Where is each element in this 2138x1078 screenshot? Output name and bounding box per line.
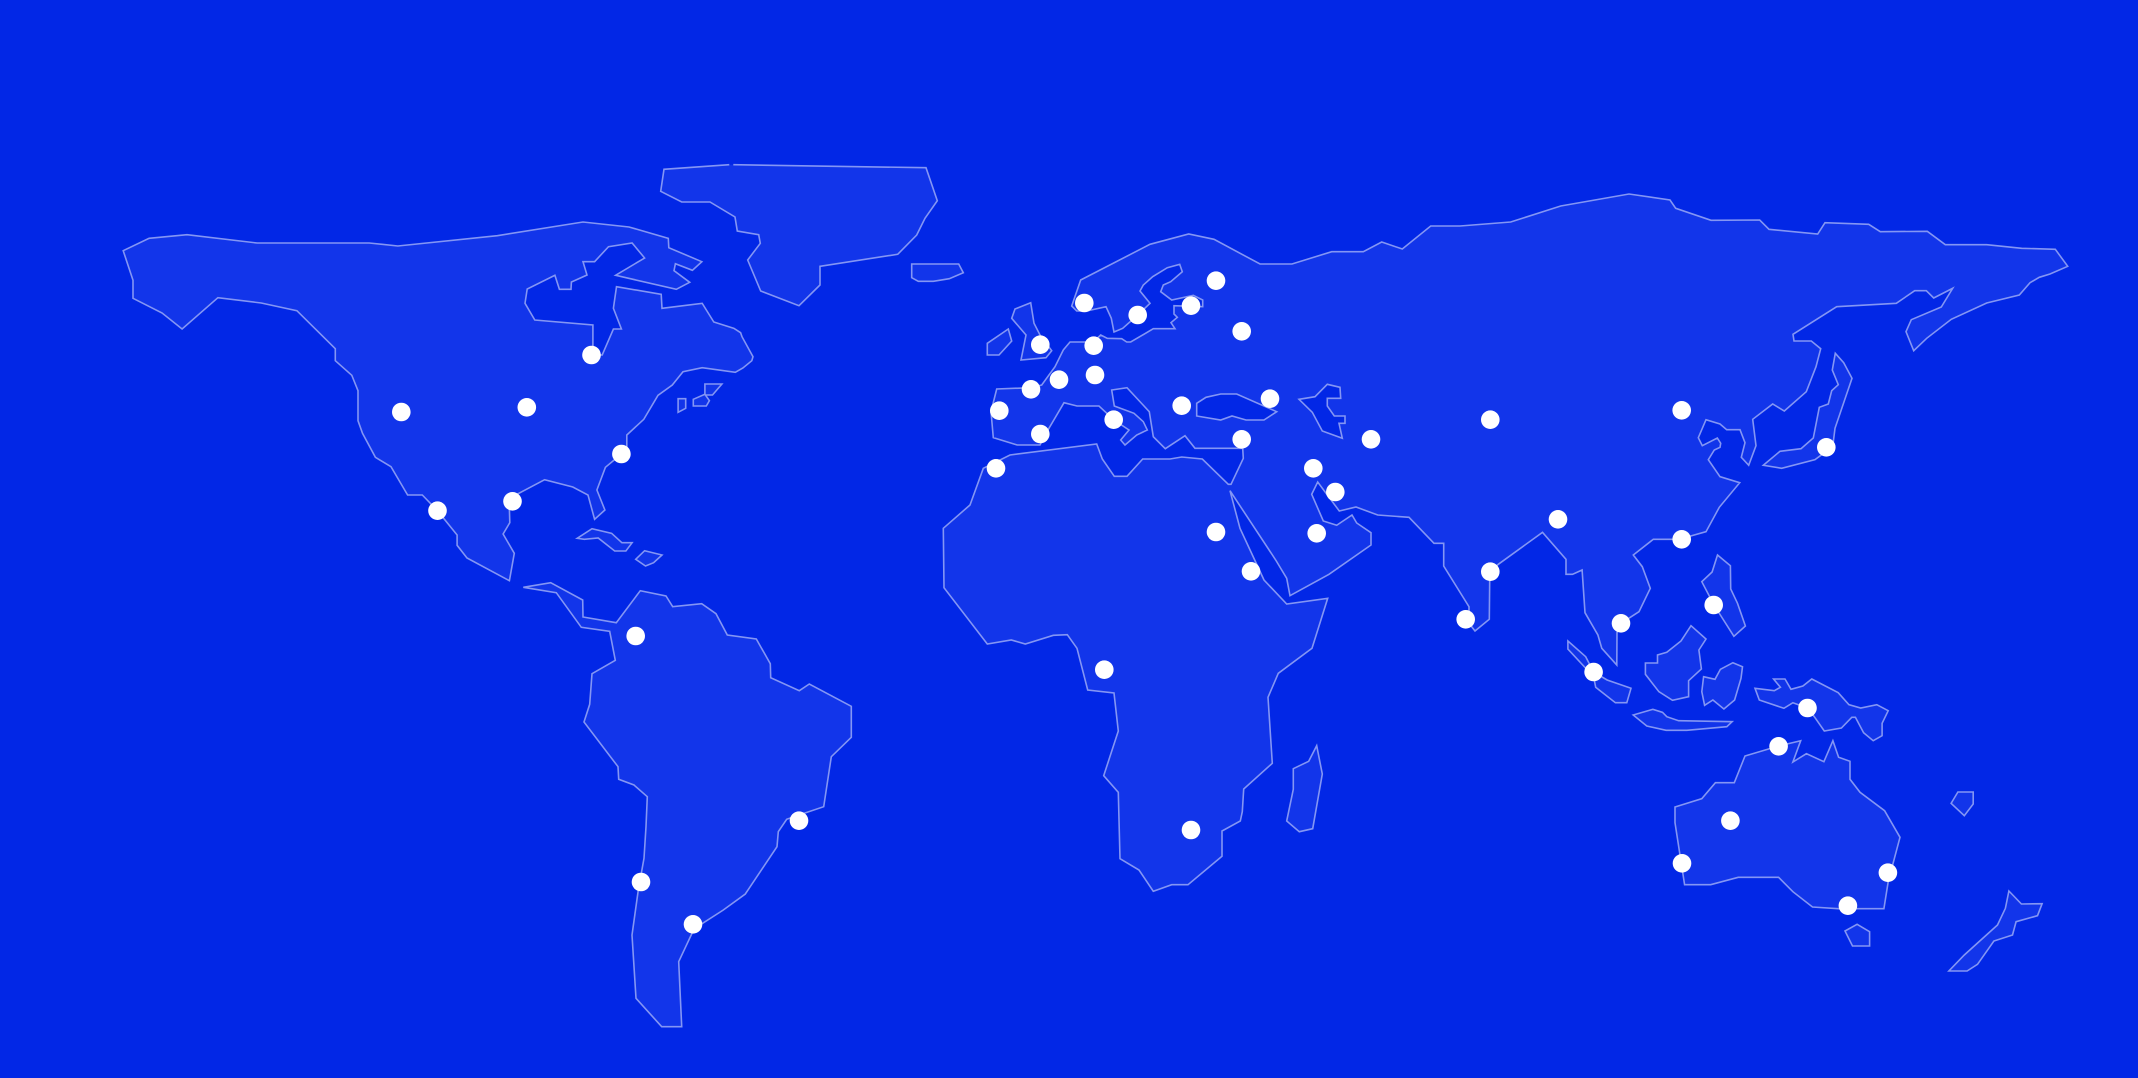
island: Cuba — [577, 529, 632, 551]
island: Sulawesi — [1702, 663, 1742, 709]
location dots — [392, 271, 1897, 934]
island: New Caledonia — [1951, 792, 1973, 816]
dots: Asia — [1456, 401, 1836, 681]
island: Prince Edward — [678, 399, 686, 412]
dots: Middle East — [1232, 389, 1380, 543]
land: Africa and Eurasia — [943, 194, 2068, 891]
island: Philippines — [1702, 555, 1745, 636]
island: Ireland — [987, 329, 1012, 355]
dots: South America — [626, 627, 808, 934]
island: Tasmania — [1845, 924, 1870, 946]
island: Madagascar — [1287, 746, 1322, 832]
island: New Zealand — [1949, 891, 2042, 971]
dots: Oceania — [1673, 699, 1897, 915]
water: Caspian Sea — [1299, 384, 1345, 438]
dots: Africa — [987, 459, 1260, 839]
island: Nova Scotia — [693, 394, 709, 406]
dots: Europe — [990, 271, 1251, 443]
island: Hispaniola — [636, 551, 662, 566]
continents and islands — [123, 165, 2068, 1027]
island: Sumatra — [1568, 641, 1631, 703]
water: Black Sea — [1197, 394, 1277, 420]
island: Great Britain — [1012, 303, 1052, 360]
land: Greenland — [661, 165, 937, 306]
island: Java — [1633, 709, 1732, 730]
island: New Guinea — [1755, 679, 1888, 741]
land: Australia — [1675, 741, 1900, 909]
island: Iceland — [912, 264, 963, 281]
land: North America — [123, 222, 753, 581]
land: South America — [523, 583, 851, 1027]
island: Newfoundland — [705, 384, 722, 395]
dots: North America — [392, 346, 631, 520]
island: Borneo — [1645, 626, 1706, 700]
island: Japan — [1763, 353, 1852, 468]
